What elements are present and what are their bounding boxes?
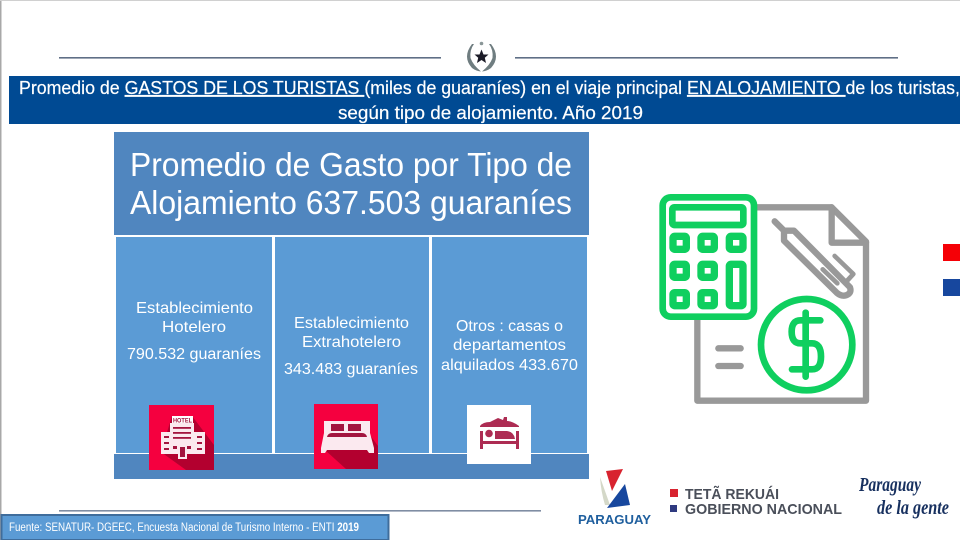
panel: other lodging: alquilados 433.670 bbox=[441, 357, 578, 374]
panel: average spend title: Promedio de Gasto por Tipo de bbox=[130, 146, 572, 183]
panel: extra-hotel establishment: Establecimiento bbox=[294, 315, 409, 332]
icon: hotel bbox=[149, 405, 214, 470]
panel: other lodging: departamentos bbox=[453, 337, 566, 354]
panel: hotel establishment bbox=[116, 237, 272, 453]
panel: other lodging bbox=[432, 237, 587, 453]
panel: hotel establishment: Hotelero bbox=[162, 319, 226, 336]
icon: double bed bbox=[314, 404, 378, 469]
panel: hotel establishment: Establecimiento bbox=[136, 300, 253, 317]
invoice document bbox=[697, 207, 866, 401]
logo: Tetã Rekuái Gobierno Nacional: GOBIERNO NACIONAL bbox=[685, 501, 842, 518]
marker: red square bbox=[943, 244, 960, 261]
logo: Tetã Rekuái Gobierno Nacional: TETÃ REKUÁI bbox=[685, 485, 779, 503]
calculator bbox=[663, 197, 754, 317]
panel: average spend title bbox=[114, 132, 589, 235]
panel: hotel establishment: 790.532 guaraníes bbox=[127, 346, 261, 363]
heading banner: Promedio de GASTOS DE LOS TURISTAS (miles de guaraníes) en el viaje principal EN ALOJAMIENTO de los turistas, bbox=[19, 78, 960, 98]
source footer bbox=[2, 515, 388, 540]
panel: other lodging: Otros : casas o bbox=[456, 318, 563, 335]
icon: calculator and invoice bbox=[663, 197, 866, 401]
logo: Paraguay de la gente bbox=[858, 474, 949, 519]
logo: Tetã Rekuái Gobierno Nacional bbox=[670, 485, 842, 518]
logo: Paraguay bbox=[578, 469, 651, 527]
marker: blue square bbox=[943, 279, 960, 296]
icon: house and bed bbox=[467, 405, 531, 464]
panel: average spend title: Alojamiento 637.503 guaraníes bbox=[130, 184, 572, 221]
panel: extra-hotel establishment bbox=[275, 237, 429, 453]
heading banner: según tipo de alojamiento. Año 2019 bbox=[338, 103, 643, 123]
source footer: Fuente: SENATUR- DGEEC, Encuesta Nacional de Turismo Interno - ENTI 2019 bbox=[9, 522, 359, 534]
panel bottom band bbox=[114, 454, 589, 479]
panel: extra-hotel establishment: 343.483 guaraníes bbox=[284, 361, 418, 378]
panel: extra-hotel establishment: Extrahotelero bbox=[302, 334, 401, 351]
icon: hotel: HOTEL bbox=[173, 418, 192, 424]
logo: Paraguay de la gente: Paraguay bbox=[858, 474, 921, 496]
icon: national emblem bbox=[467, 42, 496, 72]
heading banner bbox=[9, 76, 960, 124]
logo: Paraguay: PARAGUAY bbox=[578, 512, 651, 527]
dollar coin bbox=[761, 299, 852, 390]
